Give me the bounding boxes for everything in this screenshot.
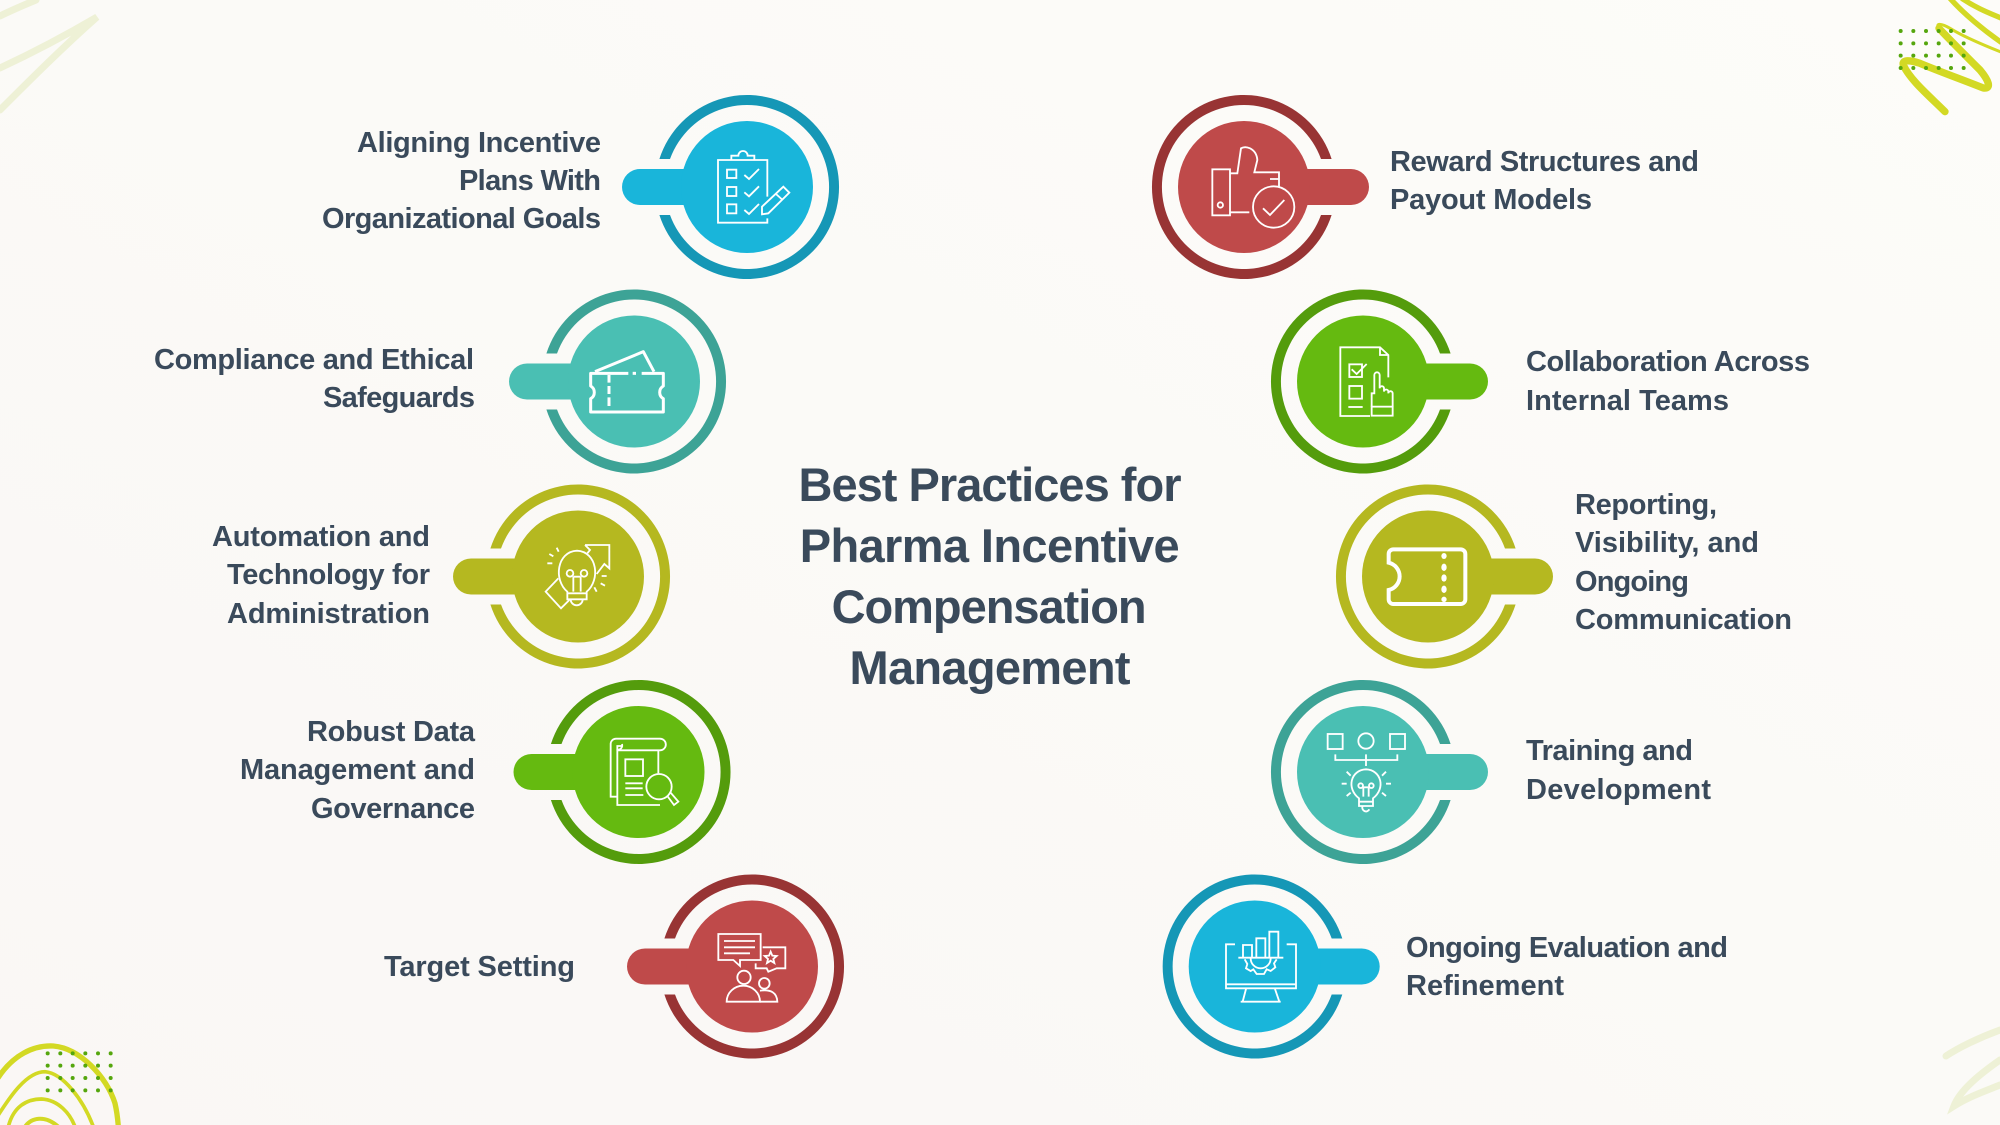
icon: document with magnifier [611,739,678,805]
icon: light bulb with arrow [546,545,609,608]
badge: blue left [622,95,839,279]
label: Compliance and Ethical Safeguards: Compliance and Ethical [154,344,474,376]
panel: Target Setting [384,874,844,1058]
label: Target Setting: Target Setting [384,951,575,983]
badge: olive right [1336,484,1553,668]
icon: ticket with flap [591,352,663,412]
label: Reporting, Visibility, and Ongoing Communication: Ongoing [1575,566,1689,598]
icon: document with pointing hand [1340,347,1393,416]
icon: ticket [1389,549,1465,604]
title: Compensation [832,580,1147,633]
icon: people with speech bubbles [718,934,785,1002]
icon: thumbs up with check [1212,147,1294,228]
label: Training and Development [1526,735,1711,806]
label: Reporting, Visibility, and Ongoing Communication: Visibility, and [1575,527,1759,559]
badge: olive left [453,484,670,668]
badge: teal left [509,290,726,474]
panel: Compliance and Ethical Safeguards [154,290,726,474]
label: Robust Data Management and Governance: Management and [240,754,475,786]
label: Automation and Technology for Administration: Automation and [212,521,430,553]
label: Aligning Incentive Plans With Organizational Goals: Plans With [459,165,601,197]
label: Training and Development: Training and [1526,735,1693,767]
title: Best Practices for [798,458,1182,511]
panel: Ongoing Evaluation and Refinement [1163,874,1728,1058]
label: Compliance and Ethical Safeguards: Safeguards [323,382,475,414]
label: Ongoing Evaluation and Refinement [1406,932,1728,1002]
badge: red right [1152,95,1369,279]
label: Aligning Incentive Plans With Organizational Goals: Organizational Goals [322,203,601,235]
label: Reward Structures and Payout Models: Reward Structures and [1390,146,1699,178]
label: Reporting, Visibility, and Ongoing Communication [1575,489,1792,636]
panel: Automation and Technology [212,484,670,668]
label: Robust Data Management and Governance [240,716,476,825]
decoration: top-left faint scribble [0,0,97,110]
decoration: bottom-left arcs and dots [0,1046,118,1125]
panel: Reporting, Visibility [1336,484,1792,668]
panel: Collaboration Across Internal Teams [1271,290,1810,474]
label: Ongoing Evaluation and Refinement: Refinement [1406,970,1564,1002]
label: Training and Development: Development [1526,774,1711,806]
label: Reporting, Visibility, and Ongoing Communication: Communication [1575,604,1792,636]
label: Collaboration Across Internal Teams: Collaboration Across [1526,346,1810,378]
icon: clipboard checklist [718,151,789,223]
badge: green right [1271,290,1488,474]
label: Robust Data Management and Governance: Robust Data [307,716,476,748]
title: Pharma Incentive [800,519,1180,572]
badge: teal right [1271,680,1488,864]
label: Ongoing Evaluation and Refinement: Ongoing Evaluation and [1406,932,1728,964]
label: Automation and Technology for Administration [212,521,430,630]
label: Automation and Technology for Administration: Administration [227,598,430,630]
icon: monitor with bars and gear [1226,932,1296,1002]
label: Compliance and Ethical Safeguards [154,344,475,414]
decoration: bottom-right faint scribble [1946,1030,2000,1106]
label: Reporting, Visibility, and Ongoing Communication: Reporting, [1575,489,1717,521]
label: Reward Structures and Payout Models: Payout Models [1390,184,1592,216]
label: Reward Structures and Payout Models [1390,146,1699,216]
label: Aligning Incentive Plans With Organizational Goals: Aligning Incentive [357,127,601,159]
badge: blue right [1163,874,1380,1058]
label: Robust Data Management and Governance: Governance [311,793,475,825]
badge: red left [627,874,844,1058]
label: Aligning Incentive Plans With Organizational Goals [322,127,601,235]
label: Automation and Technology for Administration: Technology for [227,559,430,591]
panel: Robust Data Management [240,680,731,864]
label: Collaboration Across Internal Teams [1526,346,1810,417]
title [798,458,1182,694]
panel: Aligning Incentive Plans [322,95,839,279]
icon: org shapes with bulb [1328,733,1405,811]
panel: Reward Structures [1152,95,1699,279]
panel: Training and Development [1271,680,1711,864]
title: Management [850,641,1131,694]
badge: green left [514,680,731,864]
decoration: top-right scribble and dots [1899,0,2000,112]
label: Collaboration Across Internal Teams: Internal Teams [1526,385,1729,417]
